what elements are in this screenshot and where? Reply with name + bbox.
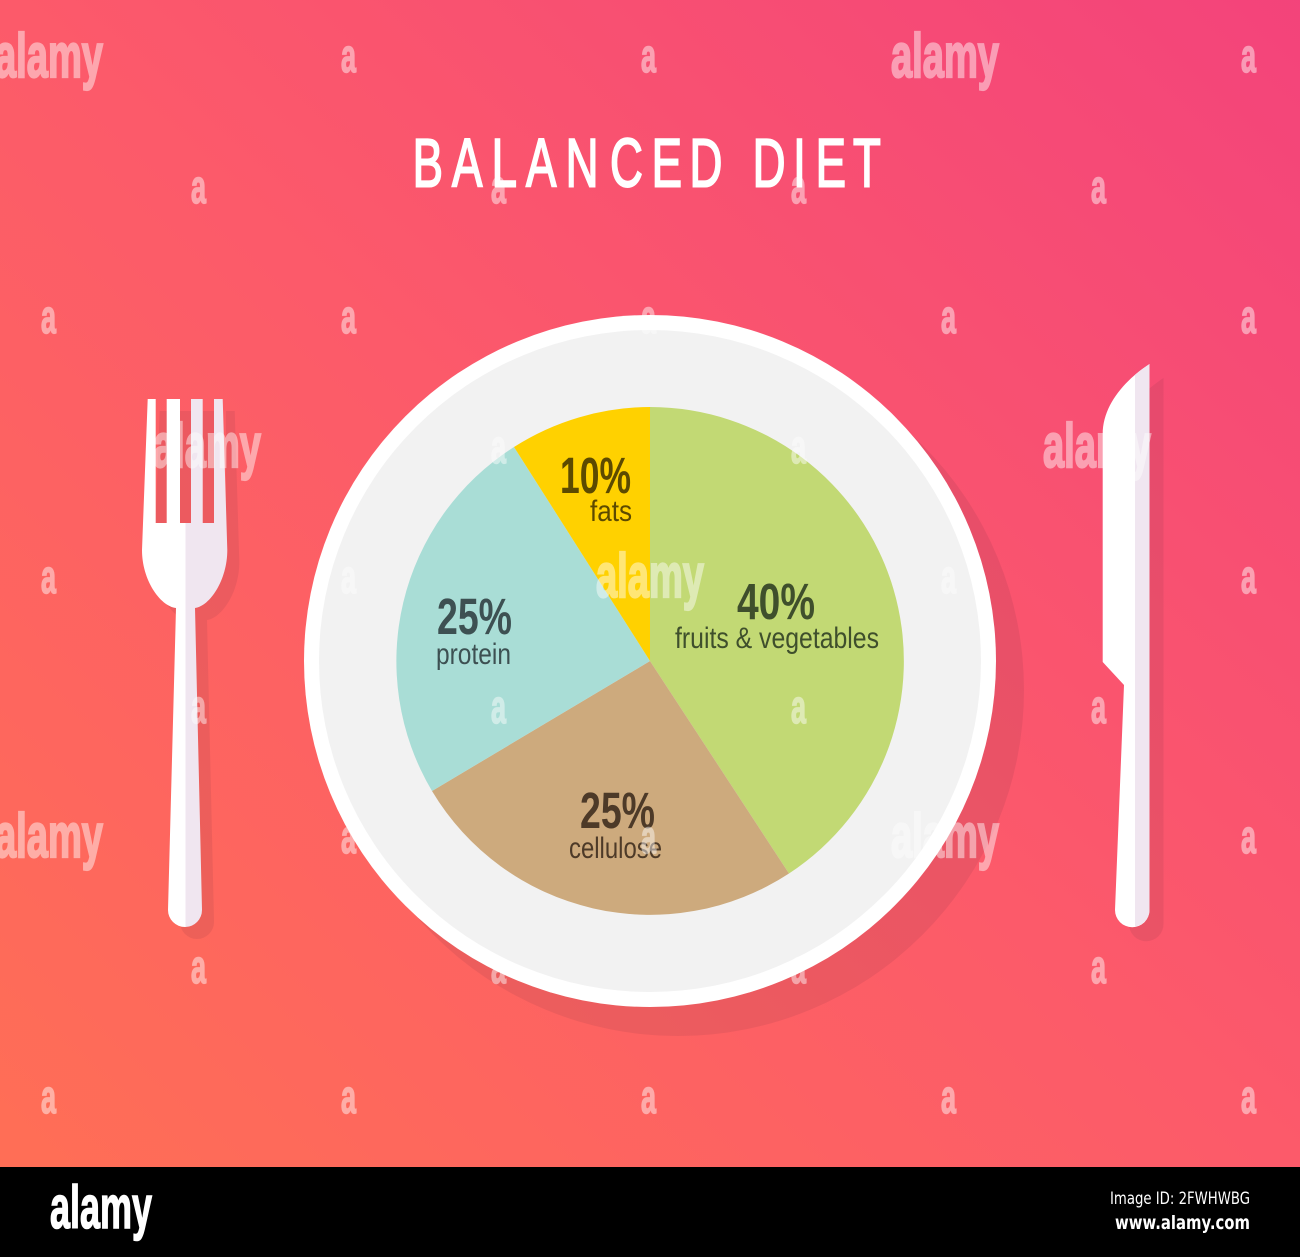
plate well — [319, 330, 981, 992]
watermarks: a — [1241, 29, 1256, 82]
label: protein — [436, 588, 512, 671]
label: fats: fats — [590, 495, 632, 528]
watermarks: a — [41, 1070, 56, 1123]
fork — [142, 399, 239, 939]
watermarks: a — [341, 810, 356, 863]
label: fruits and vegetables: 40% — [737, 573, 815, 630]
label: fats — [560, 447, 632, 528]
watermarks: a — [791, 680, 806, 733]
watermarks: a — [1091, 940, 1106, 993]
fork left half — [142, 399, 186, 927]
plate — [304, 315, 1024, 1036]
watermarks: a — [641, 810, 656, 863]
slice: fruits and vegetables — [650, 407, 904, 874]
watermarks: alamy — [1043, 412, 1151, 481]
watermarks: alamy — [153, 412, 261, 481]
watermarks: a — [1241, 1070, 1256, 1123]
label: protein: protein — [436, 638, 511, 671]
watermarks: a — [41, 550, 56, 603]
watermarks: a — [491, 420, 506, 473]
watermarks: a — [641, 1070, 656, 1123]
label: cellulose: cellulose — [569, 832, 662, 865]
watermarks: a — [341, 550, 356, 603]
watermarks: alamy — [891, 802, 999, 871]
label: fruits and vegetables — [675, 573, 879, 655]
watermarks: a — [341, 29, 356, 82]
watermarks: a — [491, 160, 506, 213]
website: www.alamy.com — [1115, 1212, 1250, 1234]
watermarks: a — [791, 940, 806, 993]
watermarks: a — [491, 940, 506, 993]
watermarks: a — [791, 160, 806, 213]
footer bar — [0, 1167, 1300, 1257]
plate rim — [304, 315, 996, 1007]
watermarks: a — [191, 940, 206, 993]
knife — [1103, 364, 1164, 941]
label: protein: 25% — [437, 588, 512, 645]
knife blade and handle left — [1103, 364, 1150, 927]
watermarks: alamy — [596, 542, 704, 611]
watermarks: a — [641, 290, 656, 343]
label: fruits and vegetables: fruits & vegetables — [675, 622, 879, 655]
fork right half — [186, 399, 227, 927]
watermarks: a — [41, 290, 56, 343]
watermarks: a — [941, 550, 956, 603]
watermarks: a — [491, 680, 506, 733]
watermarks: a — [1241, 550, 1256, 603]
pie chart — [396, 407, 904, 915]
watermarks: a — [191, 680, 206, 733]
knife right side — [1135, 364, 1150, 926]
watermarks: a — [641, 29, 656, 82]
slice: cellulose — [432, 661, 789, 915]
label: fats: 10% — [560, 447, 631, 504]
plate shadow — [332, 344, 1024, 1036]
watermarks: alamy — [0, 22, 103, 91]
image id: Image ID: 2FWHWBG — [1110, 1189, 1250, 1209]
watermarks: a — [341, 290, 356, 343]
label: cellulose — [569, 782, 662, 865]
watermarks: a — [941, 1070, 956, 1123]
watermarks: a — [1241, 290, 1256, 343]
footer logo: alamy — [50, 1174, 152, 1241]
slice: protein — [396, 447, 650, 791]
watermarks: a — [791, 420, 806, 473]
fork shadow — [154, 411, 239, 939]
knife shadow — [1117, 378, 1164, 941]
label: cellulose: 25% — [580, 782, 655, 839]
watermarks: a — [941, 290, 956, 343]
watermarks: a — [191, 160, 206, 213]
watermarks: alamy — [0, 802, 103, 871]
watermarks: alamy — [891, 22, 999, 91]
watermarks: a — [1091, 680, 1106, 733]
watermarks: a — [341, 1070, 356, 1123]
title: BALANCED DIET — [413, 125, 881, 202]
slice: fats — [514, 407, 650, 661]
watermarks: a — [1091, 160, 1106, 213]
watermarks: a — [1241, 810, 1256, 863]
